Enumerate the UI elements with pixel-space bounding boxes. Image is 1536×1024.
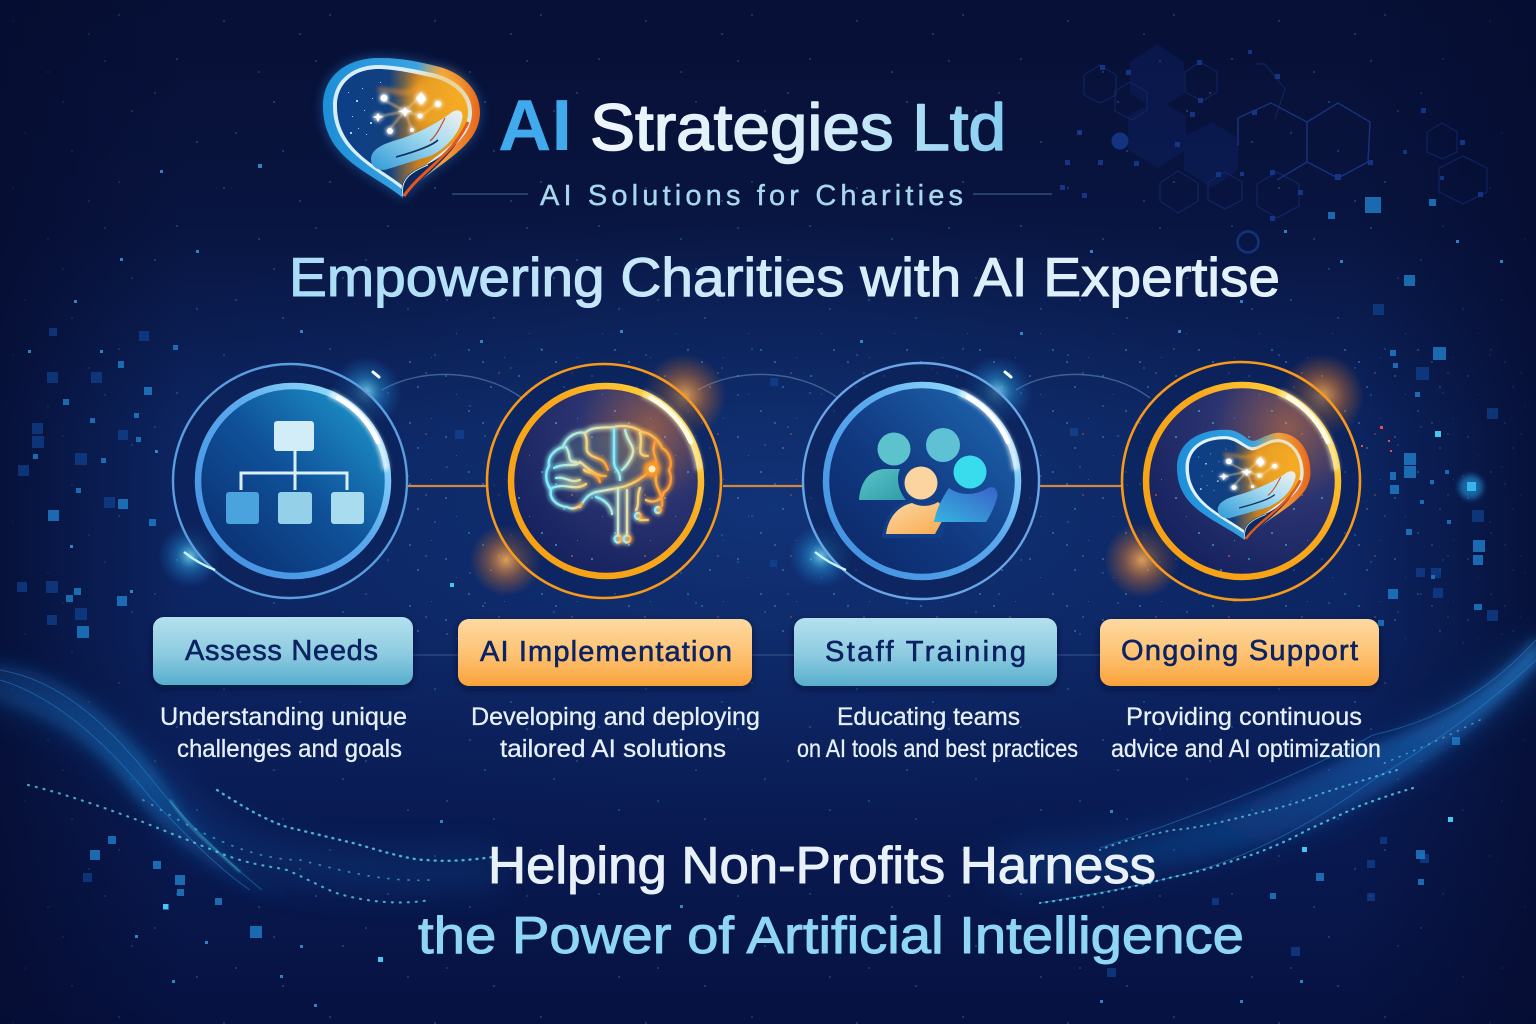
label: ongoing support xyxy=(1100,619,1379,686)
description: ongoing support: Providing continuous xyxy=(1126,703,1362,731)
glowing squares xyxy=(163,431,1476,962)
step 3 circle with people icon xyxy=(789,356,1039,599)
label: assess needs xyxy=(153,617,413,685)
label: assess needs: Assess Needs xyxy=(185,635,378,667)
small specks xyxy=(28,164,1503,1007)
connector lines between steps xyxy=(382,374,1150,655)
icon: heart and hand xyxy=(1177,430,1310,540)
company name: AI xyxy=(498,86,572,166)
description: assess needs: challenges and goals xyxy=(177,735,402,763)
tagline: AI Solutions for Charities xyxy=(540,180,963,212)
description: ongoing support: advice and AI optimization xyxy=(1111,735,1381,763)
step 1 circle with org chart icon xyxy=(158,356,407,598)
label: staff training xyxy=(794,618,1057,686)
closing statement: Helping Non-Profits Harness xyxy=(488,837,1156,895)
bottom light waves xyxy=(0,636,1536,903)
icon: org chart xyxy=(226,421,364,524)
description: ongoing support xyxy=(1111,703,1381,763)
bright squares xyxy=(33,197,1485,938)
description: ai implementation: Developing and deploying xyxy=(471,703,760,731)
closing statement: the Power of Artificial Intelligence xyxy=(418,907,1244,965)
icon: glowing brain with circuit xyxy=(546,426,671,542)
brand logo: heart and hand xyxy=(323,58,480,198)
description: ai implementation: tailored AI solutions xyxy=(500,735,726,763)
dim squares xyxy=(17,304,1498,977)
step 3: staff training xyxy=(789,356,1078,763)
step 2: ai implementation xyxy=(458,354,760,763)
description: assess needs: Understanding unique xyxy=(160,703,407,731)
description: staff training xyxy=(797,703,1078,763)
main heading: Empowering Charities with AI Expertise xyxy=(289,246,1280,308)
label: staff training: Staff Training xyxy=(825,636,1026,668)
label: ai implementation: AI Implementation xyxy=(480,636,732,668)
description: assess needs xyxy=(160,703,407,763)
closing statement xyxy=(418,837,1244,965)
step 2 circle with brain icon xyxy=(470,354,726,598)
description: ai implementation xyxy=(471,703,760,763)
icon: team of people xyxy=(859,428,997,538)
label: ongoing support: Ongoing Support xyxy=(1121,635,1358,667)
label: ai implementation xyxy=(458,619,752,686)
step 1: assess needs xyxy=(153,356,413,763)
company name: Strategies Ltd xyxy=(590,90,1006,164)
description: staff training: Educating teams xyxy=(837,703,1020,731)
step 4: ongoing support xyxy=(1100,354,1381,763)
step 4 circle with heart icon xyxy=(1104,354,1364,600)
hexagon network decoration xyxy=(1060,44,1487,252)
description: staff training: on AI tools and best practices xyxy=(797,735,1078,763)
